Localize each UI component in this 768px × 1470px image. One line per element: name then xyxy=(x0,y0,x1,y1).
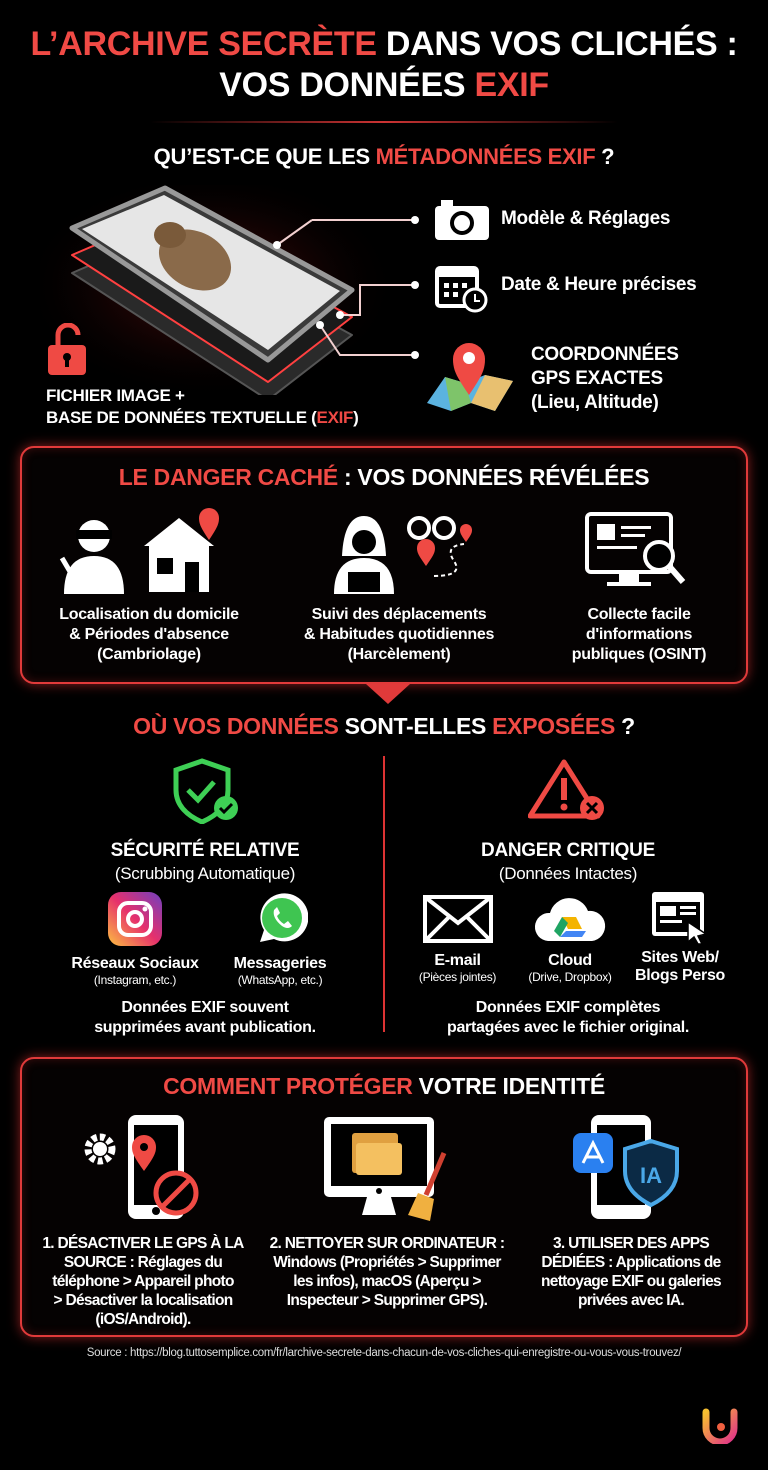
title: L’ARCHIVE SECRÈTE DANS VOS CLICHÉS : xyxy=(30,25,738,63)
column: danger critique xyxy=(481,760,655,883)
item: cloud: (Drive, Dropbox) xyxy=(528,970,612,984)
source: Source : https://blog.tuttosemplice.com/fr/larchive-secrete-dans-chacun-de-vos-cliches-qui-enregistre-ou-vous-vous-trouvez/ xyxy=(87,1347,681,1359)
step 3: privées avec IA. xyxy=(578,1292,684,1309)
step 1: (iOS/Android). xyxy=(95,1311,191,1328)
text: exif completes: partagées avec le fichier original. xyxy=(447,1019,689,1036)
step 1: SOURCE : Réglages du xyxy=(64,1254,222,1271)
item: domicile: & Périodes d'absence xyxy=(69,626,229,643)
column: danger critique: DANGER CRITIQUE xyxy=(481,840,655,861)
item: messageries: Messageries xyxy=(234,955,326,972)
text: exif supprimees: supprimées avant publication. xyxy=(94,1019,316,1036)
step 1 xyxy=(42,1115,244,1328)
text: exif supprimees: Données EXIF souvent xyxy=(121,999,289,1016)
item: cloud: Cloud xyxy=(548,952,592,969)
label: file + exif: FICHIER IMAGE + xyxy=(46,386,185,405)
item: email: E-mail xyxy=(434,952,481,969)
label: gps: (Lieu, Altitude) xyxy=(531,392,658,413)
logo xyxy=(702,1408,738,1444)
text: exif supprimees xyxy=(94,999,316,1036)
item: email: (Pièces jointes) xyxy=(419,970,496,984)
label: gps xyxy=(531,342,679,413)
item: domicile: Localisation du domicile xyxy=(59,606,239,623)
item: osint: publiques (OSINT) xyxy=(572,646,706,663)
heading: where exposed: OÙ VOS DONNÉES SONT-ELLES EXPOSÉES ? xyxy=(133,713,635,739)
item: messageries xyxy=(234,893,326,987)
step 2 xyxy=(270,1117,504,1309)
step 3: nettoyage EXIF ou galeries xyxy=(541,1273,721,1290)
label: file + exif xyxy=(46,386,359,427)
item: osint xyxy=(572,512,706,663)
step 2: 2. NETTOYER SUR ORDINATEUR : xyxy=(270,1235,504,1252)
item: reseaux sociaux xyxy=(71,892,199,987)
panel: danger xyxy=(20,446,748,684)
step 1: téléphone > Appareil photo xyxy=(52,1273,234,1290)
item: sites web: Blogs Perso xyxy=(635,967,725,984)
item: reseaux sociaux: Réseaux Sociaux xyxy=(71,955,199,972)
arrow: down triangle xyxy=(366,684,410,704)
step 3 xyxy=(541,1115,721,1309)
item: cloud xyxy=(528,898,612,984)
icon: green shield xyxy=(174,758,238,824)
item: messageries: (WhatsApp, etc.) xyxy=(238,973,322,987)
step 1: > Désactiver la localisation xyxy=(54,1292,232,1309)
item: reseaux sociaux: (Instagram, etc.) xyxy=(94,973,176,987)
step 1: 1. DÉSACTIVER LE GPS À LA xyxy=(42,1235,244,1252)
item: domicile xyxy=(59,508,239,663)
column: securite relative xyxy=(111,758,299,883)
label: date: Date & Heure précises xyxy=(501,274,696,295)
heading: protect: COMMENT PROTÉGER VOTRE IDENTITÉ xyxy=(163,1073,605,1099)
step 2: Windows (Propriétés > Supprimer xyxy=(273,1254,501,1271)
icon: calendar xyxy=(435,266,488,312)
step 3: IA xyxy=(640,1163,662,1188)
label: modele: Modèle & Réglages xyxy=(501,208,670,229)
illustration: phone with exif layers xyxy=(70,186,419,395)
item: osint: d'informations xyxy=(586,626,692,643)
step 3: DÉDIÉES : Applications de xyxy=(541,1254,721,1271)
icon: camera xyxy=(435,200,489,240)
item: domicile: (Cambriolage) xyxy=(97,646,201,663)
label: gps: COORDONNÉES xyxy=(531,344,679,365)
item: email xyxy=(419,895,496,984)
item: suivi: (Harcèlement) xyxy=(348,646,450,663)
label: file + exif: BASE DE DONNÉES TEXTUELLE (EXIF) xyxy=(46,408,359,427)
item: sites web xyxy=(635,892,725,984)
item: suivi: & Habitudes quotidiennes xyxy=(304,626,494,643)
step 2: les infos), macOS (Aperçu > xyxy=(293,1273,481,1290)
item: suivi xyxy=(304,516,494,663)
title xyxy=(30,24,738,104)
step 2: Inspecteur > Supprimer GPS). xyxy=(287,1292,487,1309)
column: securite relative: (Scrubbing Automatique) xyxy=(115,864,295,883)
item: osint: Collecte facile xyxy=(587,606,691,623)
item: sites web: Sites Web/ xyxy=(641,949,719,966)
item: suivi: Suivi des déplacements xyxy=(312,606,486,623)
text: exif completes xyxy=(447,999,689,1036)
label: gps: GPS EXACTES xyxy=(531,368,663,389)
title: VOS DONNÉES EXIF xyxy=(219,66,549,104)
column: danger critique: (Données Intactes) xyxy=(499,864,637,883)
text: exif completes: Données EXIF complètes xyxy=(476,999,660,1016)
icon: gps map xyxy=(427,343,513,411)
icon: open lock xyxy=(48,323,86,375)
step 3: 3. UTILISER DES APPS xyxy=(553,1235,709,1252)
heading: danger: LE DANGER CACHÉ : VOS DONNÉES RÉVÉLÉES xyxy=(119,464,649,490)
icon: warning xyxy=(528,760,604,820)
heading: what is exif: QU’EST-CE QUE LES MÉTADONNÉES EXIF ? xyxy=(154,144,614,169)
column: securite relative: SÉCURITÉ RELATIVE xyxy=(111,840,299,861)
panel: protect xyxy=(20,1057,748,1337)
